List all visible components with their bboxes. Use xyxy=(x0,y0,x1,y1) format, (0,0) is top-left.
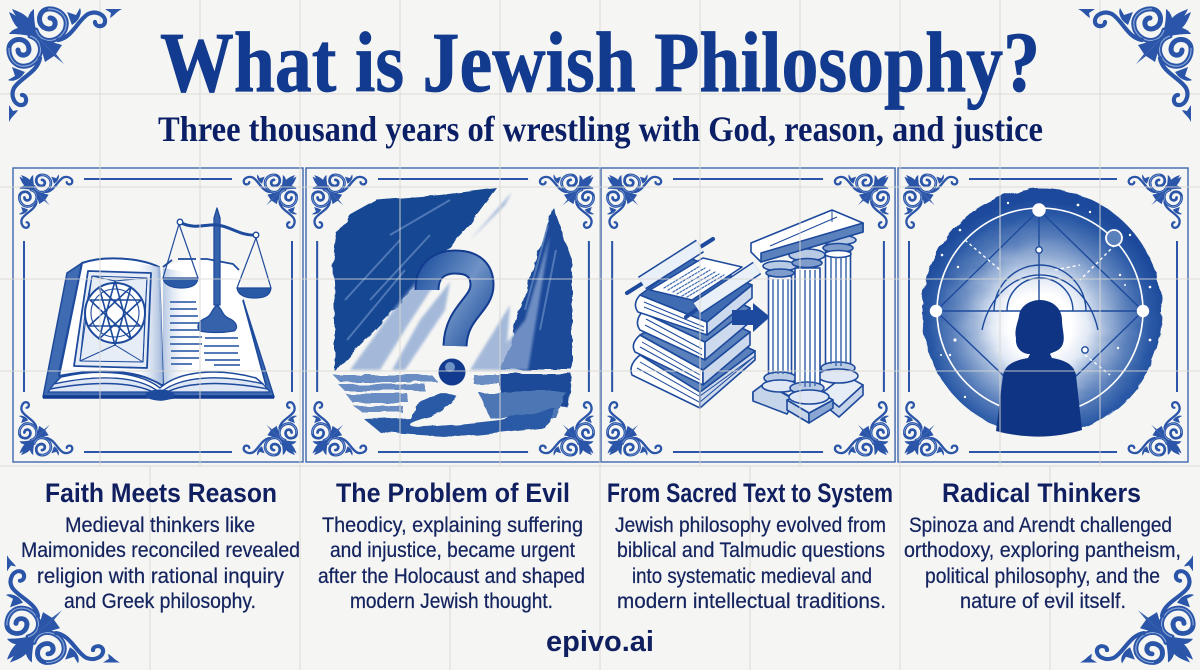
icon: cosmic diagram and silhouette xyxy=(922,189,1162,437)
text block: faith meets reason: religion with rational inquiry xyxy=(37,564,284,588)
decorative corner: top left xyxy=(8,8,122,122)
text block: sacred text to system: modern intellectual traditions. xyxy=(617,589,886,613)
decorative corner: bottom right xyxy=(1080,555,1194,663)
panel: radical thinkers xyxy=(898,168,1188,462)
text block: sacred text to system xyxy=(607,478,893,613)
text block: sacred text to system: Jewish philosophy evolved from xyxy=(615,513,886,537)
text block: radical thinkers: orthodoxy, exploring pantheism, xyxy=(904,538,1181,562)
text block: sacred text to system: From Sacred Text to System xyxy=(607,478,893,508)
decorative corner: bottom left xyxy=(6,555,120,663)
text block: problem of evil: The Problem of Evil xyxy=(336,478,570,508)
dark storm brushwork xyxy=(333,188,572,372)
text block: faith meets reason: Medieval thinkers like xyxy=(65,513,255,537)
icon: open book and scales xyxy=(43,208,274,400)
icon: scales xyxy=(163,208,271,332)
arrow xyxy=(732,303,770,332)
text block: sacred text to system: into systematic medieval and xyxy=(632,564,872,588)
text block: faith meets reason: Faith Meets Reason xyxy=(45,478,277,508)
icon: books and scroll xyxy=(631,258,755,408)
water and reflection xyxy=(333,374,572,437)
decorative corner: top right xyxy=(1078,8,1192,122)
text block: radical thinkers: nature of evil itself. xyxy=(960,589,1126,613)
icon: question mark in storm xyxy=(333,188,572,437)
brand: epivo.ai xyxy=(546,626,654,658)
text block: problem of evil xyxy=(318,478,585,613)
icon: columns xyxy=(751,210,863,423)
text block: radical thinkers: political philosophy, and the xyxy=(925,564,1160,588)
silhouette xyxy=(996,300,1082,437)
text block: faith meets reason xyxy=(21,478,300,613)
text block: radical thinkers: Radical Thinkers xyxy=(942,478,1141,508)
text block: problem of evil: after the Holocaust and shaped xyxy=(318,564,585,588)
text block: sacred text to system: biblical and Talmudic questions xyxy=(617,538,885,562)
stars xyxy=(940,202,1151,398)
subtitle: Three thousand years of wrestling with God, reason, and justice xyxy=(158,109,1043,149)
text block: problem of evil: and injustice, became urgent xyxy=(330,538,575,562)
title: What is Jewish Philosophy? xyxy=(160,14,1040,110)
panel: sacred text to system xyxy=(601,168,895,462)
text block: faith meets reason: and Greek philosophy. xyxy=(64,589,256,613)
question mark xyxy=(427,262,482,346)
geometric diagram xyxy=(930,204,1148,414)
panel: faith meets reason xyxy=(13,168,303,462)
text block: radical thinkers: Spinoza and Arendt challenged xyxy=(909,513,1172,537)
text block: radical thinkers xyxy=(904,478,1181,613)
text block: problem of evil: Theodicy, explaining suffering xyxy=(322,513,583,537)
panel: problem of evil xyxy=(306,168,600,462)
icon: scroll xyxy=(627,239,757,317)
text block: faith meets reason: Maimonides reconciled revealed xyxy=(21,538,300,562)
text block: problem of evil: modern Jewish thought. xyxy=(350,589,553,613)
